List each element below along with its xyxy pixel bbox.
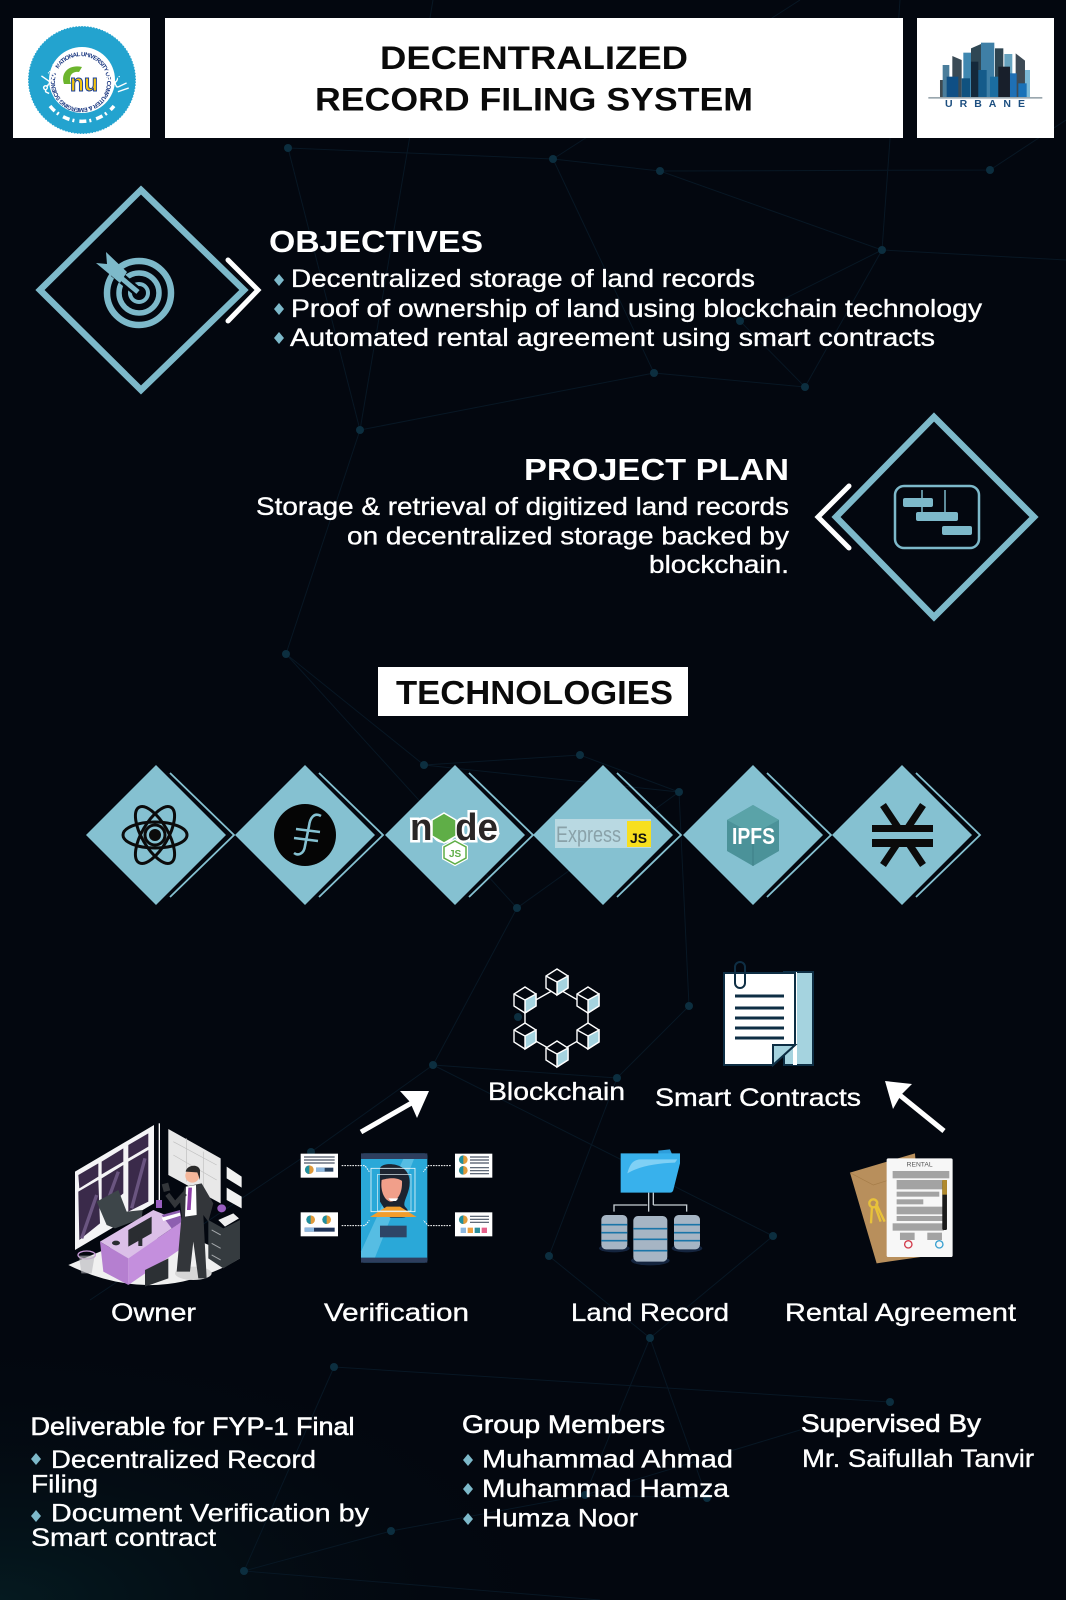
list: deliverables: Filing (31, 1470, 98, 1498)
panel: project plan (256, 417, 1034, 617)
text: project plan description: on decentralized storage backed by (347, 522, 790, 550)
icon: gantt chart in diamond (836, 417, 1034, 617)
list: objectives: Automated rental agreement using smart contracts (290, 324, 935, 352)
illustration: owner in office (68, 1123, 242, 1287)
heading: project plan: PROJECT PLAN (524, 452, 789, 487)
icon: react (86, 765, 234, 905)
label: rental agreement: Rental Agreement (785, 1299, 1016, 1327)
heading: supervised by: Supervised By (801, 1410, 982, 1438)
label: blockchain: Blockchain (488, 1078, 625, 1106)
header logo: urbane: URBANE (945, 98, 1025, 110)
arrow: chevron left (818, 486, 849, 548)
heading: objectives: OBJECTIVES (269, 224, 483, 259)
text: project plan description (256, 493, 790, 579)
panel: objectives (40, 190, 983, 390)
icon: stellar (832, 765, 980, 905)
label: owner: Owner (111, 1299, 196, 1327)
panel: group members (462, 1411, 733, 1532)
icon: express js (533, 765, 681, 905)
list: objectives (274, 265, 983, 352)
icon: node.js: node (410, 807, 498, 849)
arrow: rental agreement to smart contracts (885, 1081, 944, 1131)
heading: deliverable for FYP-1 final: Deliverable for FYP-1 Final (30, 1413, 354, 1441)
icon: express js: Express (556, 822, 621, 847)
list: deliverables: Document Verification by (51, 1500, 370, 1528)
label: smart contracts: Smart Contracts (655, 1084, 861, 1112)
panel: deliverables (30, 1413, 370, 1552)
illustration: land record database and rental agreement (599, 1149, 953, 1265)
heading: group members: Group Members (462, 1411, 665, 1439)
arrow: chevron right (228, 260, 258, 321)
list: deliverables: Decentralized Record (51, 1446, 316, 1474)
header logo: university: nu (70, 70, 98, 97)
label: verification: Verification (324, 1299, 469, 1327)
list: objectives: Decentralized storage of land records (291, 265, 755, 293)
illustration: face verification (301, 1153, 492, 1263)
title panel (165, 18, 903, 138)
list: members: Muhammad Ahmad (482, 1446, 733, 1474)
header logo: urbane (917, 18, 1054, 138)
heading: technologies: TECHNOLOGIES (396, 674, 673, 711)
panel: technology icons (86, 765, 980, 905)
icon: express js: JS (630, 830, 647, 846)
icon: target in diamond (40, 190, 244, 390)
header logo: university (13, 18, 150, 138)
illustration: land record database and rental agreement: RENTAL (907, 1162, 933, 1169)
text: project plan description: blockchain. (649, 551, 789, 579)
list: members: Muhammad Hamza (482, 1475, 729, 1503)
list: deliverables: Smart contract (31, 1524, 216, 1552)
text: supervisor name: Mr. Saifullah Tanvir (802, 1445, 1034, 1473)
list: members (463, 1446, 733, 1532)
label: land record: Land Record (571, 1299, 729, 1327)
text: project plan description: Storage & retrieval of digitized land records (256, 493, 789, 521)
header logo: university: NATIONAL UNIVERSITY OF COMPUTER & EMERGING SCIENCES (50, 52, 112, 112)
header logo: university: الذي علم بالقلم (41, 55, 129, 94)
title panel: RECORD FILING SYSTEM (315, 82, 753, 118)
icon: ipfs (683, 765, 831, 905)
icon: filecoin (235, 765, 383, 905)
list: members: Humza Noor (482, 1504, 638, 1532)
list: deliverables (31, 1446, 370, 1552)
list: objectives: Proof of ownership of land using blockchain technology (291, 295, 983, 323)
title panel: DECENTRALIZED (380, 40, 688, 76)
panel: supervisor (801, 1410, 1034, 1473)
arrow: verification to blockchain (361, 1091, 429, 1132)
icon: blockchain (514, 969, 599, 1067)
icon: node.js: JS (449, 849, 462, 860)
icon: smart contract document (724, 962, 813, 1065)
heading: technologies (378, 667, 688, 716)
icon: node.js (385, 765, 533, 905)
icon: ipfs: IPFS (732, 823, 775, 849)
